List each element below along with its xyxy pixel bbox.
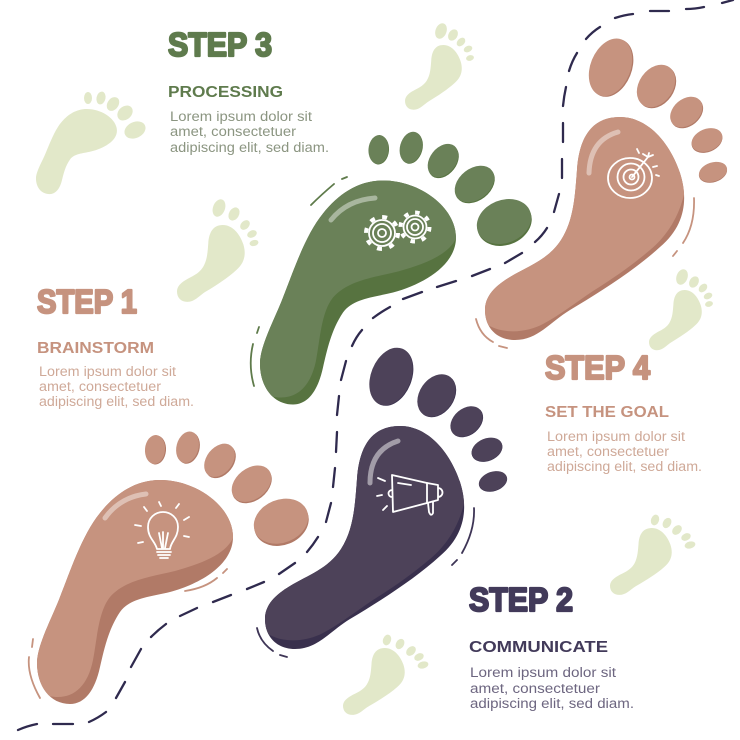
body: Lorem ipsum dolor sit: [39, 364, 176, 379]
accent strokes: [29, 569, 227, 698]
heading: STEP 2: [469, 581, 573, 618]
text block: step 4: [545, 349, 702, 474]
text block: step 2: [469, 581, 634, 711]
toes: [144, 429, 316, 554]
accent strokes: [251, 177, 347, 386]
subheading: BRAINSTORM: [37, 340, 154, 357]
pale footprint: centre left: [177, 197, 259, 302]
subheading: PROCESSING: [168, 84, 283, 101]
footprint: step 1 brown: [20, 429, 316, 704]
heading: STEP 3: [168, 26, 272, 63]
body: amet, consectetuer: [470, 681, 601, 696]
heading: STEP 4: [545, 349, 651, 386]
footprint: step 3 green: [243, 129, 539, 404]
body: amet, consectetuer: [547, 444, 670, 459]
highlight: [589, 132, 618, 173]
body: Lorem ipsum dolor sit: [470, 665, 616, 680]
toes: [361, 341, 510, 495]
accent strokes: [476, 198, 694, 348]
icon: megaphone: [377, 475, 442, 515]
body: adipiscing elit, sed diam.: [547, 459, 702, 474]
icon: gears: [366, 212, 430, 249]
pale footprint: top centre: [405, 22, 475, 110]
body: adipiscing elit, sed diam.: [39, 394, 194, 409]
body: amet, consectetuer: [39, 379, 162, 394]
subheading: COMMUNICATE: [469, 639, 608, 656]
highlight: [105, 494, 146, 518]
icon: light bulb: [135, 502, 189, 558]
pale footprint: bottom centre: [343, 633, 429, 715]
toes: [581, 32, 730, 186]
heading: STEP 1: [37, 283, 137, 320]
accent strokes: [257, 508, 474, 657]
sole: [265, 426, 464, 649]
body: adipiscing elit, sed diam.: [170, 140, 329, 155]
body: Lorem ipsum dolor sit: [547, 429, 685, 444]
body: adipiscing elit, sed diam.: [470, 696, 634, 711]
highlight: [370, 441, 398, 483]
highlight: [331, 198, 375, 220]
sole: [485, 117, 684, 340]
icon: target: [608, 149, 659, 198]
sole: [37, 480, 233, 704]
footprint: step 2 purple: [250, 341, 510, 657]
text block: step 3: [168, 26, 329, 155]
subheading: SET THE GOAL: [545, 404, 669, 421]
sole: [260, 180, 456, 404]
footprint: step 4 brown: [470, 32, 730, 348]
body: amet, consectetuer: [170, 124, 297, 139]
body: Lorem ipsum dolor sit: [170, 109, 312, 124]
pale footprint: right lower: [610, 513, 696, 595]
toes: [367, 129, 539, 254]
text block: step 1: [37, 283, 194, 409]
pale footprint: top left: [36, 91, 148, 194]
pale footprint: right upper: [649, 268, 714, 350]
